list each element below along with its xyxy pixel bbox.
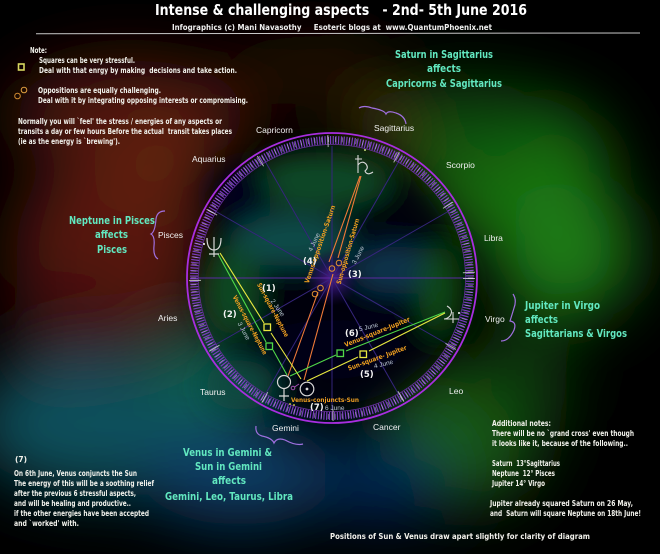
sign labels: Aquarius: [192, 154, 226, 164]
icon: conjunction: [291, 384, 299, 390]
zodiac wheel: [187, 133, 477, 423]
text block: conjunction note: [14, 455, 155, 528]
aspect labels: Sun-square- Jupiter: [347, 344, 408, 372]
sign labels: Scorpio: [446, 160, 475, 170]
subtitle credits: Infographics (c) Mani Navasothy Esoteric blogs at www.QuantumPhoenix.net: [172, 23, 492, 32]
square lines to Neptune: [218, 253, 301, 379]
icon: Sun: [300, 382, 314, 396]
icon: Neptune: [203, 237, 221, 257]
sign labels: Taurus: [200, 387, 226, 397]
text block: additional notes: Saturn 13°Sagittarius: [492, 459, 560, 468]
sign labels: Gemini: [272, 423, 299, 433]
wheel spokes: [190, 146, 474, 410]
date labels: 3 June: [351, 245, 367, 266]
text block: conjunction note: if the other energies have been accepted: [14, 509, 149, 518]
sign labels: [158, 123, 505, 433]
callout: Venus and Sun: Sun in Gemini: [195, 461, 262, 473]
aspect labels: Venus-conjuncts-Sun: [291, 396, 359, 404]
callout: Venus and Sun: affects: [212, 475, 246, 487]
aspect numbers: (4): [303, 257, 317, 267]
sign labels: Aries: [158, 313, 177, 323]
text block: additional notes: it looks like it, because of the following..: [492, 439, 628, 448]
callout: Venus and Sun: Gemini, Leo, Taurus, Libra: [165, 491, 293, 503]
text block: conjunction note: after the previous 6 stressful aspects,: [14, 489, 136, 498]
text block: additional notes: [489, 419, 641, 518]
text block: conjunction note: and will be healing and productive..: [14, 499, 131, 508]
sign labels: Leo: [449, 386, 463, 396]
sign labels: Libra: [484, 233, 503, 243]
date labels: 4 June: [373, 359, 394, 370]
callout: Neptune: affects: [95, 229, 128, 241]
date labels: 6 June: [325, 405, 345, 412]
brace: Sagittarius: [359, 106, 406, 124]
aspect labels: [231, 204, 412, 404]
callout: Saturn: Capricorns & Sagittarius: [386, 78, 502, 90]
note panel: (ie as the energy is `brewing').: [18, 137, 120, 146]
aspect labels: Venus-square-Jupiter: [343, 315, 412, 349]
note panel: Normally you will `feel' the stress / energies of any aspects or: [18, 117, 222, 126]
callout: Jupiter: affects: [525, 314, 558, 326]
footnote: Positions of Sun & Venus draw apart slightly for clarity of diagram: [330, 532, 590, 541]
text block: conjunction note: and `worked' with.: [14, 519, 79, 528]
icon: Saturn: [355, 149, 373, 174]
callout: Saturn: affects: [427, 63, 461, 75]
aspect numbers: (6): [345, 329, 359, 339]
callout: Saturn: Saturn in Sagittarius: [395, 49, 493, 61]
wheel interior tones: [204, 152, 462, 410]
callout: Jupiter: Jupiter in Virgo: [524, 300, 600, 312]
sign labels: Sagittarius: [374, 123, 414, 133]
aspect numbers: (3): [348, 270, 362, 280]
aspect numbers: (5): [360, 370, 374, 380]
note panel: Deal with it by integrating opposing interests or compromising.: [38, 96, 248, 105]
date labels: 2 June: [269, 298, 286, 318]
wheel rings: [187, 133, 477, 423]
text block: additional notes: Jupiter 14° Virgo: [491, 479, 545, 488]
date labels: 5 June: [358, 322, 379, 333]
date labels: [236, 232, 394, 412]
note panel: Squares can be very stressful.: [39, 56, 135, 65]
note panel: Note:: [30, 46, 47, 55]
callout: Jupiter: [524, 300, 627, 340]
icons: opposition glyphs: [312, 260, 342, 297]
aspect labels: Venus-opposition-Saturn: [303, 204, 337, 284]
icon: opposition legend: [15, 87, 27, 99]
text block: additional notes: Neptune 12° Pisces: [492, 469, 555, 478]
note panel: [15, 46, 248, 146]
date labels: 3 June: [236, 321, 251, 342]
callout: Neptune: [69, 215, 155, 256]
aspect numbers: [223, 257, 374, 413]
icons: aspect squares: [264, 324, 366, 358]
square lines to Jupiter: [290, 312, 445, 381]
icon: Venus: [278, 376, 295, 406]
sign labels: Capricorn: [256, 125, 293, 135]
aspect numbers: (7): [310, 403, 324, 413]
brace: Gemini: [256, 426, 303, 444]
title: Intense & challenging aspects - 2nd- 5th June 2016: [155, 1, 527, 19]
opposition lines to Saturn: [288, 176, 361, 380]
note panel: Deal with that enrgy by making decisions and take action.: [39, 66, 237, 75]
callout: Venus and Sun: Venus in Gemini &: [183, 447, 272, 459]
callout: Venus and Sun: [165, 447, 293, 503]
brace: Virgo: [501, 294, 515, 341]
header rule: [36, 32, 640, 35]
sign labels: Pisces: [158, 230, 183, 240]
sign labels: Virgo: [485, 314, 505, 324]
aspect numbers: (1): [262, 284, 276, 294]
aspect labels: Sun-square-Neptune: [255, 282, 291, 339]
note panel: transits a day or few hours Before the actual transit takes places: [18, 127, 232, 136]
aspect labels: Venus-square-Neptune: [231, 294, 269, 356]
callout: Neptune: Neptune in Pisces: [69, 215, 155, 227]
icon: Jupiter: [444, 306, 460, 323]
aspect numbers: (2): [223, 310, 237, 320]
aspect lines: [218, 176, 445, 381]
text block: conjunction note: (7): [15, 455, 27, 464]
text block: conjunction note: The energy of this will be a soothing relief: [14, 479, 155, 488]
callout: Saturn: [386, 49, 502, 90]
callout: Jupiter: Sagittarians & Virgos: [525, 328, 627, 340]
aspect labels: Sun-opposition-Saturn: [335, 217, 361, 285]
date labels: 4 June: [307, 232, 322, 253]
text block: additional notes: Additional notes:: [492, 419, 551, 428]
note panel: Oppositions are equally challenging.: [38, 86, 161, 95]
text block: conjunction note: On 6th June, Venus conjuncts the Sun: [14, 469, 137, 478]
callout: Neptune: Pisces: [97, 244, 127, 256]
icon: square legend: [18, 64, 24, 70]
sign labels: Cancer: [373, 422, 401, 432]
brace: Pisces: [151, 211, 165, 259]
